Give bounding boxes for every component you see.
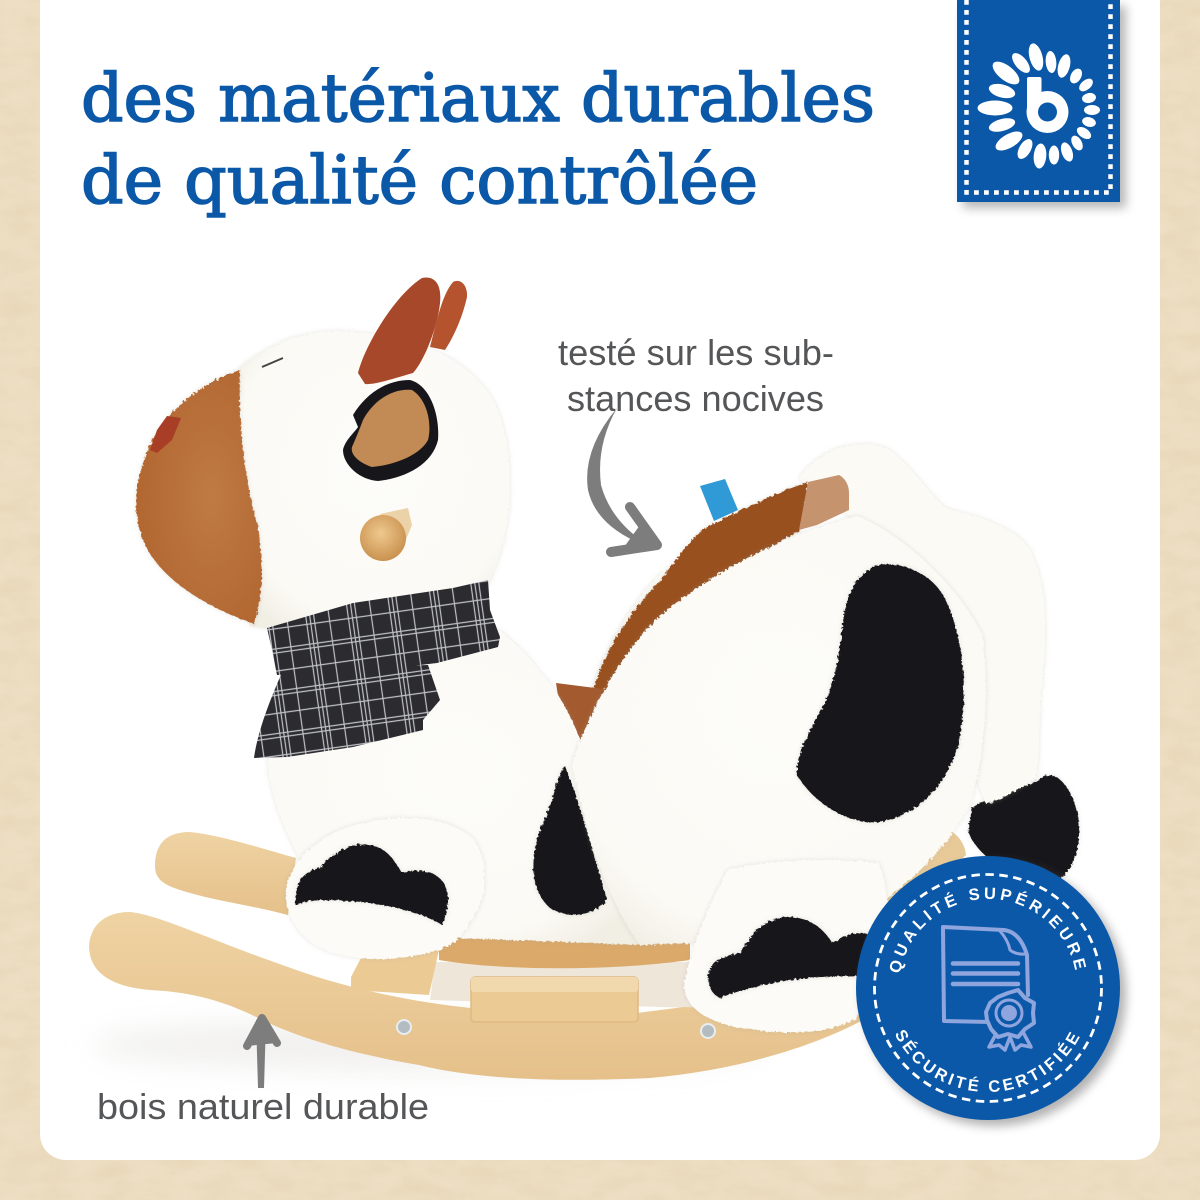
white back strip [590,570,665,695]
saddle piece [556,683,603,752]
legs [351,950,439,995]
head [238,331,510,630]
back paw [684,860,887,1032]
tan patch [799,475,849,530]
front ear horn [358,277,440,384]
badge text: SÉCURITÉ CERTIFIÉE [896,1030,1080,1092]
back paw pad [708,917,870,998]
callout: harmful substances [558,332,834,552]
rear body [572,516,986,945]
title: des matériaux durables [81,60,875,137]
badge text: QUALITÉ SUPÉRIEURE [890,888,1086,972]
brown back [594,482,808,700]
scarf lower [254,665,440,758]
title: de qualité contrôlée [81,142,758,219]
ear [343,380,438,481]
front paw [286,818,484,959]
inner ear [352,390,429,467]
product: rocking cow [89,277,1079,1080]
nostril [150,416,181,453]
badge text [890,888,1086,1092]
black spot large [797,564,964,822]
ground shadow [90,1019,770,1071]
seat block [471,977,638,1022]
callout: natural wood [97,1018,429,1127]
blue tag [700,479,738,521]
label: testé sur les sub- [558,332,834,373]
label [558,332,834,419]
screws [397,1020,715,1038]
tail pom [968,775,1079,880]
scarf upper [267,580,500,675]
title [81,60,875,219]
black spot small [533,766,607,915]
chest [268,630,640,945]
arrow [587,408,657,552]
right rocker end [880,829,966,905]
wooden ball [360,515,406,561]
gap shade [430,962,695,1008]
front rocker [89,912,870,1080]
middle arc [439,928,690,968]
label: stances nocives [567,378,824,419]
badge: quality seal [856,856,1132,1132]
rear rocker [155,832,296,915]
hump and tail [799,444,1045,804]
wooden handle [380,508,412,542]
icon: certificate [943,927,1034,1050]
logo: bébé brand tag [957,0,1126,208]
label: bois naturel durable [97,1086,429,1127]
eye sliver [262,358,283,367]
arrow [247,1018,277,1088]
front paw pad [295,845,448,925]
back horn [430,281,467,350]
muzzle [136,370,262,624]
